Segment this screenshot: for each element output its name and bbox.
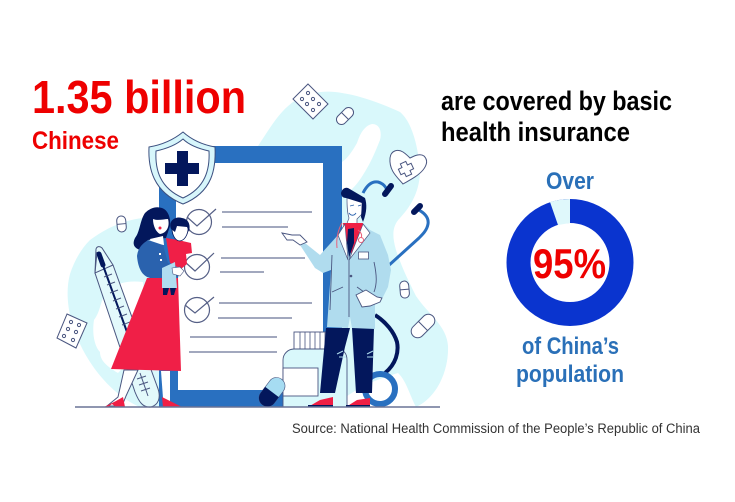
figure: doctor	[282, 188, 391, 407]
check mark 1	[186, 209, 216, 234]
donut value: 95%	[533, 240, 606, 287]
doctor face	[346, 198, 362, 226]
woman lips	[158, 226, 162, 230]
background leaf: left white	[93, 282, 150, 373]
child head	[172, 224, 188, 241]
doctor trousers	[320, 328, 374, 393]
stethoscope around neck	[337, 223, 364, 248]
woman blouse buttons	[159, 254, 162, 260]
icon: capsule bottom	[256, 374, 288, 410]
icon: capsule small right	[399, 281, 410, 298]
background blob: left	[68, 218, 170, 407]
heading: 1.35 billion Chinese: 1.35 billion	[32, 71, 246, 123]
label: of China's population: of China’s	[522, 333, 619, 360]
background leaf: upper white	[342, 124, 381, 196]
doctor coat button	[350, 275, 352, 277]
icon: pill blister left	[57, 314, 87, 348]
woman right leg	[161, 371, 170, 407]
heading: 1.35 billion Chinese: Chinese	[32, 127, 119, 155]
woman skirt	[111, 278, 181, 371]
doctor scarf	[343, 223, 363, 255]
icon: capsule left	[116, 216, 127, 232]
child hand	[172, 267, 184, 276]
donut chart: 95%	[518, 199, 622, 314]
background leaf: lower white	[342, 373, 416, 407]
child shirt	[166, 238, 192, 269]
woman legs	[107, 370, 138, 406]
background blob: right	[258, 92, 448, 407]
figure: mother holding child	[104, 207, 192, 407]
icon: small capsule top	[334, 105, 356, 127]
child hair	[170, 218, 190, 232]
clipboard	[159, 146, 342, 407]
child legs	[162, 262, 177, 288]
check mark 3	[184, 297, 214, 322]
label: of China's population: population	[516, 361, 624, 388]
label: Over: Over	[546, 168, 594, 195]
doctor coat	[300, 223, 391, 329]
ground line	[75, 406, 440, 408]
doctor paper	[356, 290, 382, 307]
doctor tie	[347, 228, 354, 258]
icon: heart with plus	[390, 150, 427, 184]
doctor hair	[341, 188, 366, 222]
clipboard frame	[159, 146, 342, 407]
checklist lines	[189, 212, 312, 352]
doctor shoe soles	[308, 405, 370, 407]
woman shoes	[104, 397, 182, 407]
child shoes	[163, 288, 176, 295]
check mark 2	[184, 253, 214, 280]
doctor coat details	[330, 255, 376, 317]
doctor lapels	[338, 224, 370, 260]
doctor scarf over lapel	[345, 224, 363, 245]
icon: stethoscope	[363, 182, 428, 404]
doctor name badge	[358, 252, 368, 259]
doctor trouser marks	[337, 351, 374, 357]
woman hair	[134, 207, 170, 250]
woman face	[153, 219, 169, 234]
illustration: healthcare scene	[57, 84, 448, 410]
icon: pill blister top	[293, 84, 328, 119]
woman collar	[150, 236, 164, 245]
woman blouse	[137, 240, 180, 278]
label: of China's population	[516, 333, 624, 388]
icon: shield with cross	[149, 132, 215, 204]
doctor hand	[282, 233, 307, 245]
doctor shoes	[308, 397, 370, 407]
heading: 1.35 billion Chinese	[32, 71, 246, 155]
text: are covered by basic health insurance: health insurance	[441, 117, 630, 147]
clipboard paper	[176, 163, 323, 390]
doctor face lines	[349, 205, 361, 215]
source note: Source: National Health Commission of the People’s Republic of China	[292, 421, 700, 436]
icon: capsule large right	[409, 312, 437, 340]
icon: thermometer	[95, 247, 159, 407]
icon: medicine bottle	[283, 332, 347, 407]
text: are covered by basic health insurance	[441, 86, 672, 147]
text: are covered by basic health insurance: are covered by basic	[441, 86, 672, 116]
